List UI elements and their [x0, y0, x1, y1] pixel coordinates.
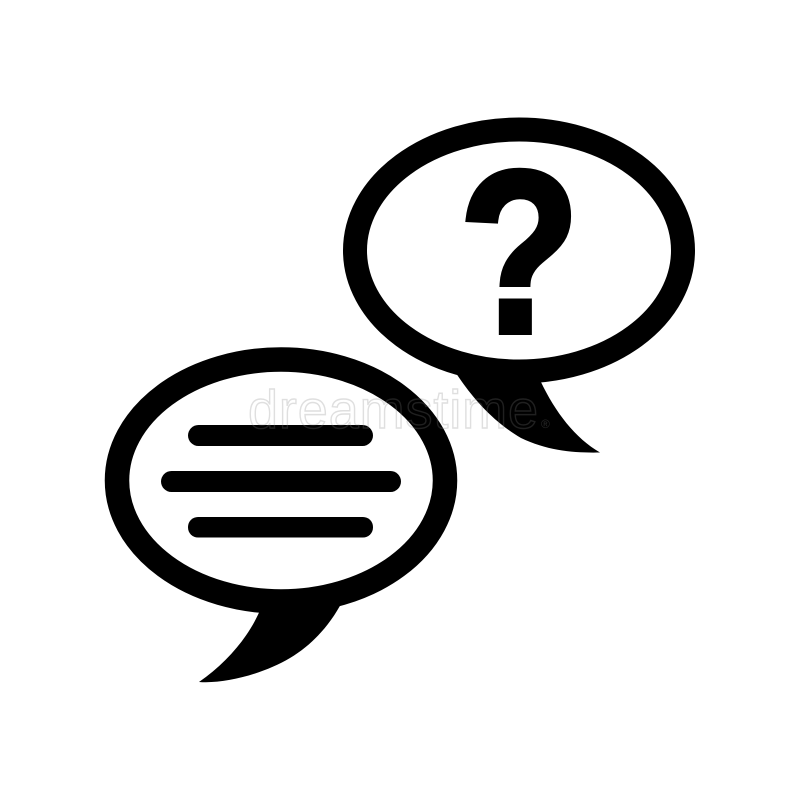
text line: middle — [161, 471, 401, 492]
bubble tail: question — [454, 370, 600, 453]
text line: bottom — [188, 517, 373, 538]
watermark registered mark: ® — [541, 417, 550, 431]
speech bubble: question — [355, 123, 683, 453]
bubble outline: question — [355, 130, 683, 372]
speech bubble: text lines — [117, 360, 445, 682]
watermark — [248, 380, 550, 440]
bubble tail: text lines — [199, 602, 342, 682]
question mark: ? — [459, 123, 580, 381]
watermark word: dreamstime — [248, 380, 538, 440]
bubble outline: text lines — [117, 360, 445, 602]
text line: top — [188, 425, 373, 446]
